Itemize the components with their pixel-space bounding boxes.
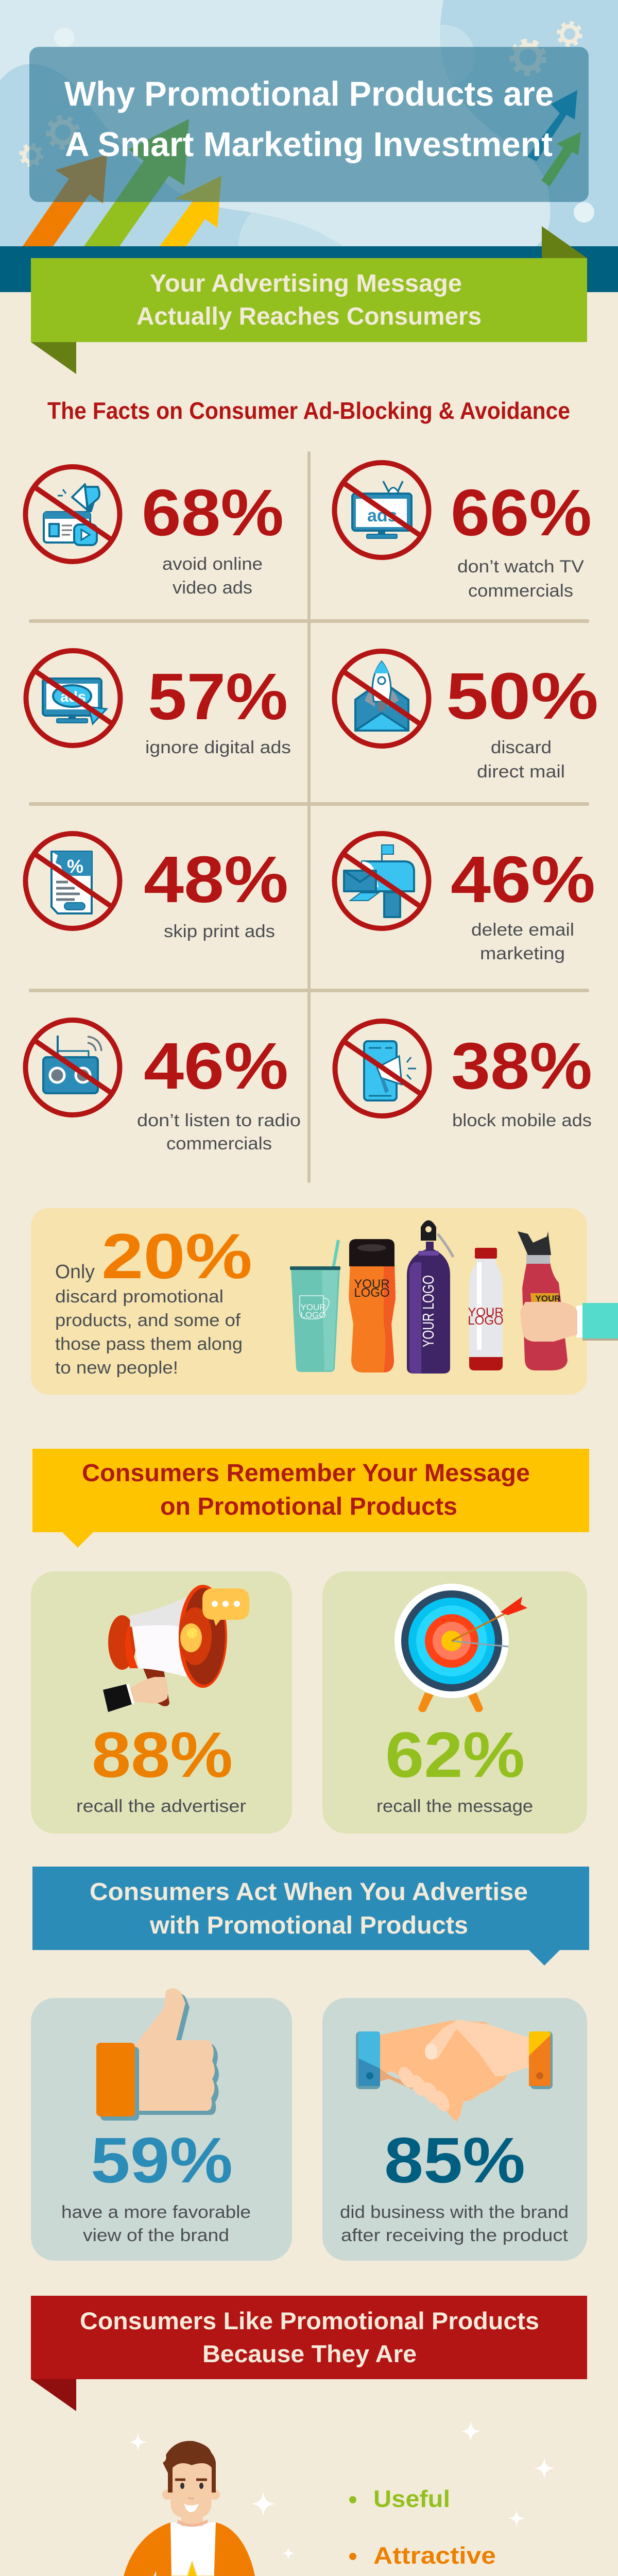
hair xyxy=(163,2441,216,2493)
banner: consumers remember xyxy=(32,1449,589,1548)
icon: prohibition sign xyxy=(335,463,428,557)
icon: monitor with speech bubble xyxy=(43,679,107,724)
stat: radio commercials xyxy=(26,1020,301,1154)
icon: prohibition sign xyxy=(26,834,119,928)
grid dividers xyxy=(29,451,589,1183)
percentage: 48% xyxy=(144,843,288,917)
icon: target with arrow xyxy=(394,1584,527,1712)
product: purple bottle xyxy=(407,1220,453,1374)
label xyxy=(477,738,565,782)
heading text: Consumers Like Promotional Products xyxy=(80,2307,539,2334)
icon: megaphone held in hand xyxy=(103,1585,249,1712)
label: have a more favorable xyxy=(61,2202,251,2222)
arrow: orange xyxy=(23,155,107,246)
percentage: 62% xyxy=(385,1719,525,1791)
shirt star xyxy=(172,2562,212,2576)
label: skip print ads xyxy=(164,922,275,941)
label: avoid online xyxy=(162,554,263,574)
heading text: with Promotional Products xyxy=(149,1912,468,1939)
label: direct mail xyxy=(477,762,565,782)
icon: television: ads xyxy=(367,506,398,526)
stat text: products, and some of xyxy=(55,1311,241,1330)
title: A Smart Marketing Investment xyxy=(65,125,553,164)
product: orange bottle xyxy=(349,1239,396,1372)
percentage: 66% xyxy=(451,476,592,550)
product: red bottle with hand: YOUR xyxy=(535,1294,561,1303)
icon: prohibition sign xyxy=(335,651,428,746)
percentage: 68% xyxy=(142,476,284,550)
icon: mobile phone with megaphone xyxy=(364,1041,416,1100)
product: white bottle: YOUR xyxy=(468,1306,504,1319)
label: marketing xyxy=(480,944,565,963)
dark blue band xyxy=(0,246,618,292)
ribbon: your advertising message xyxy=(31,226,587,374)
label xyxy=(471,920,574,963)
icon: prohibition sign xyxy=(26,467,119,562)
icon: monitor with speech bubble: ads xyxy=(60,689,86,705)
label: don’t listen to radio xyxy=(137,1111,301,1130)
title xyxy=(64,75,554,164)
stat text: those pass them along xyxy=(55,1334,243,1354)
stat text xyxy=(55,1221,252,1378)
icon: megaphone and video window xyxy=(44,484,99,545)
label: view of the brand xyxy=(83,2226,229,2245)
product: white bottle xyxy=(468,1248,504,1370)
label: did business with the brand xyxy=(340,2202,569,2222)
decorative sparkles xyxy=(55,2421,555,2576)
label xyxy=(457,557,584,601)
list item: useful: Useful xyxy=(373,2485,450,2512)
arrow: dark blue right xyxy=(527,90,577,161)
heading text: Because They Are xyxy=(202,2340,417,2367)
face xyxy=(175,2480,207,2512)
product: red bottle with hand xyxy=(518,1231,618,1370)
percentage: 38% xyxy=(451,1029,592,1103)
label: recall the advertiser xyxy=(76,1797,246,1816)
title panel xyxy=(29,47,589,202)
icon: gears xyxy=(21,23,580,165)
percentage: 46% xyxy=(451,843,595,917)
stat: tv commercials xyxy=(335,463,592,601)
banner: consumers act xyxy=(32,1867,589,1965)
illustration: man with promo products xyxy=(120,2441,273,2576)
arrow: green xyxy=(84,119,189,246)
percentage: 88% xyxy=(92,1719,233,1791)
panel: recall the advertiser xyxy=(31,1571,292,1834)
icon: prohibition sign xyxy=(26,1020,119,1115)
percentage: 59% xyxy=(91,2125,233,2196)
icon: envelope with rocket xyxy=(355,662,408,731)
list item: attractive: Attractive xyxy=(373,2542,496,2569)
icon: prohibition sign xyxy=(26,651,121,745)
label: recall the message xyxy=(376,1797,533,1816)
panel: recall the message xyxy=(322,1571,587,1834)
product: orange bottle: LOGO xyxy=(354,1286,390,1300)
label: video ads xyxy=(173,578,252,598)
heading text: Consumers Remember Your Message xyxy=(82,1460,530,1487)
percentage: 46% xyxy=(144,1029,288,1103)
label xyxy=(162,554,263,598)
icon: hand and teal sleeve xyxy=(520,1302,618,1342)
subheading: the facts: The Facts on Consumer Ad-Blocking & Avoidance xyxy=(47,397,570,424)
t-shirt xyxy=(170,2522,216,2576)
stat: digital ads xyxy=(26,651,291,757)
icon: torn print page: % xyxy=(67,856,83,877)
label: delete email xyxy=(471,920,574,940)
stat text: discard promotional xyxy=(55,1287,224,1307)
product: teal tumbler: LOGO xyxy=(300,1310,326,1320)
label: ignore digital ads xyxy=(145,738,291,757)
header illustration xyxy=(0,0,618,303)
stat text: to new people! xyxy=(55,1358,178,1378)
icon: prohibition sign xyxy=(335,1021,430,1116)
label xyxy=(61,2202,251,2245)
stat: online video ads xyxy=(26,467,284,598)
product: orange bottle: YOUR xyxy=(354,1277,390,1291)
product: teal tumbler xyxy=(290,1240,340,1372)
stat: email marketing xyxy=(335,834,595,963)
stat text: Only xyxy=(55,1261,95,1283)
heading text: Consumers Act When You Advertise xyxy=(90,1878,528,1906)
arrow: yellow xyxy=(160,176,221,246)
panel: favorable view xyxy=(31,1988,292,2261)
icon: handshake xyxy=(356,2020,553,2122)
icon: radio xyxy=(43,1036,101,1093)
heading text: Actually Reaches Consumers xyxy=(136,303,482,330)
heading text xyxy=(80,2307,539,2367)
panel: only 20% discard xyxy=(31,1208,618,1395)
title: Why Promotional Products are xyxy=(64,75,554,113)
percentage: 57% xyxy=(148,660,288,734)
label: commercials xyxy=(468,581,573,601)
label: block mobile ads xyxy=(452,1111,592,1130)
stat text: 20% xyxy=(101,1221,252,1292)
label: commercials xyxy=(166,1134,272,1154)
product: white bottle: LOGO xyxy=(468,1314,504,1328)
icon: torn print page xyxy=(52,852,92,913)
icon: prohibition sign xyxy=(335,834,428,928)
label: after receiving the product xyxy=(341,2226,569,2245)
percentage: 50% xyxy=(446,659,598,733)
product: purple bottle: YOUR LOGO xyxy=(419,1275,437,1347)
neck and head xyxy=(181,2512,203,2526)
label: discard xyxy=(491,738,552,757)
panel: did business xyxy=(322,1998,587,2261)
percentage: 85% xyxy=(384,2125,525,2196)
label xyxy=(137,1111,301,1154)
cardigan xyxy=(120,2522,175,2576)
icon: mailbox with envelope xyxy=(344,845,414,917)
label: don’t watch TV xyxy=(457,557,584,577)
icon: thumbs up xyxy=(96,1988,219,2121)
banner: consumers like xyxy=(31,2296,587,2411)
list: reasons consumers like products xyxy=(349,2485,517,2576)
stat: print ads xyxy=(26,834,288,941)
icon: television xyxy=(352,481,411,538)
heading text: on Promotional Products xyxy=(160,1493,457,1520)
heading text: Your Advertising Message xyxy=(150,270,462,297)
product: teal tumbler: YOUR xyxy=(300,1302,326,1312)
heading text xyxy=(90,1878,528,1939)
heading text xyxy=(136,270,482,330)
stat: mobile ads xyxy=(335,1021,592,1130)
heading text xyxy=(82,1460,530,1520)
arrow: green right xyxy=(541,132,581,187)
stat: direct mail xyxy=(335,651,598,782)
label xyxy=(340,2202,569,2245)
